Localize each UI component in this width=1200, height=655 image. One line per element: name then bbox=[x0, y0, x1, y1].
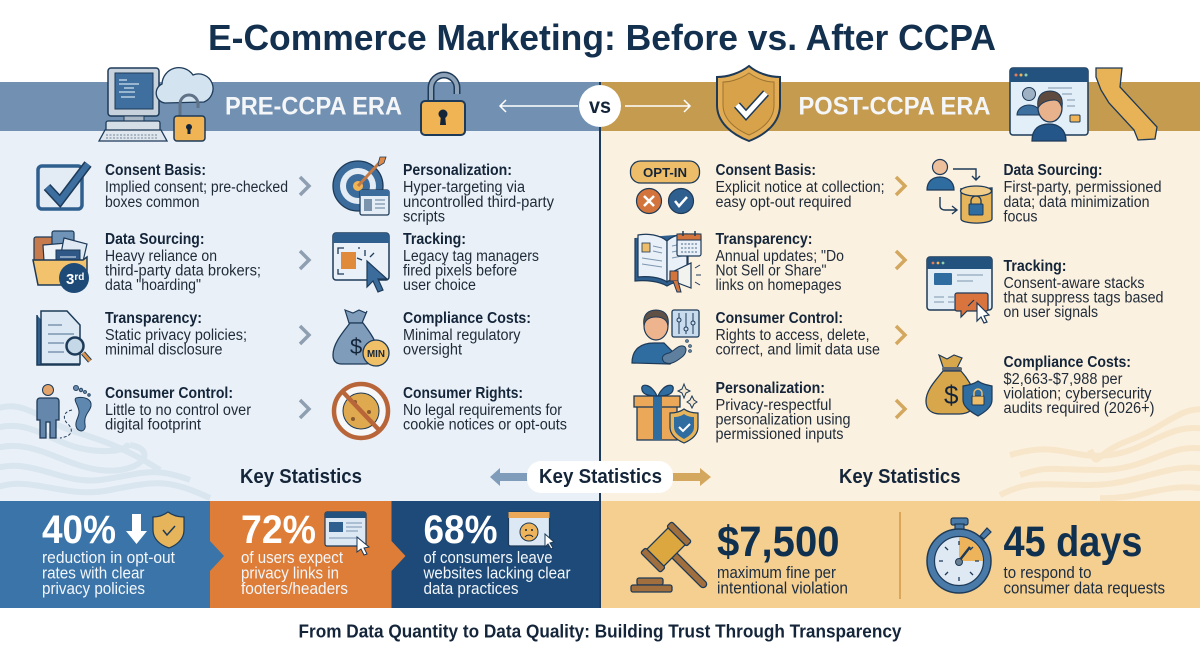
item: pre-CCPA consumer control: Consumer Control: bbox=[105, 385, 233, 402]
arrow: key statistics right bbox=[672, 468, 711, 486]
item: pre-CCPA tracking: user choice bbox=[403, 277, 476, 294]
item: post-CCPA consumer control: Consumer Control: bbox=[716, 310, 843, 327]
item: post-CCPA personalization: personalization using bbox=[716, 412, 850, 428]
arrow: right from vs bbox=[625, 100, 690, 112]
item: post-CCPA compliance costs: violation; cybersecurity bbox=[1004, 386, 1152, 402]
icon: folder with third-party badge: rd bbox=[74, 272, 84, 283]
icon: no cookies bbox=[334, 384, 388, 438]
item: pre-CCPA tracking bbox=[333, 231, 539, 294]
panel: post-CCPA statistics bbox=[601, 501, 1200, 608]
heading: post-CCPA era: POST-CCPA ERA bbox=[798, 92, 990, 120]
item: pre-CCPA personalization: scripts bbox=[403, 208, 445, 226]
item: post-CCPA consumer control: Rights to access, delete, bbox=[716, 327, 870, 344]
icon: computer with cloud and lock bbox=[99, 68, 213, 141]
item: post-CCPA data sourcing: data; data minimization bbox=[1004, 194, 1150, 211]
item: post-CCPA transparency: Annual updates; "Do bbox=[716, 248, 844, 265]
icon: person and footprint bbox=[37, 384, 91, 438]
chevrons: pre-CCPA column bbox=[300, 177, 309, 418]
panel: stat 40%: 40% bbox=[42, 508, 116, 552]
icon: user profile browser bbox=[1010, 68, 1088, 141]
icon: folder with third-party badge bbox=[33, 231, 89, 293]
item: pre-CCPA consent basis: boxes common bbox=[105, 194, 200, 211]
panel: stat 68%: websites lacking clear bbox=[423, 564, 571, 582]
arrow: key statistics left bbox=[490, 468, 528, 486]
icon: checkbox bbox=[38, 164, 88, 209]
title: E-Commerce Marketing: Before vs. After CCPA bbox=[208, 17, 996, 58]
stat: $7,500 fine: maximum fine per bbox=[717, 563, 836, 582]
item: pre-CCPA consumer rights: cookie notices or opt-outs bbox=[403, 416, 567, 434]
panel: post-CCPA background bbox=[600, 131, 1200, 501]
item: pre-CCPA consumer control bbox=[37, 384, 251, 438]
vs badge bbox=[579, 85, 621, 127]
icon: user to secure database bbox=[927, 160, 992, 223]
heading: pre-CCPA era: PRE-CCPA ERA bbox=[225, 92, 402, 120]
center key statistics pill bbox=[527, 461, 673, 493]
icon: document with magnifier bbox=[37, 311, 90, 365]
panel: stat 72% bbox=[210, 501, 393, 608]
panel: stat 68%: data practices bbox=[424, 579, 518, 598]
item: post-CCPA data sourcing: focus bbox=[1004, 208, 1038, 226]
item: post-CCPA personalization: permissioned inputs bbox=[716, 426, 844, 443]
footer tagline: From Data Quantity to Data Quality: Building Trust Through Transparency bbox=[298, 620, 902, 642]
item: pre-CCPA consumer rights bbox=[334, 384, 567, 438]
item: post-CCPA data sourcing bbox=[927, 160, 1162, 226]
item: pre-CCPA data sourcing: Data Sourcing: bbox=[105, 231, 204, 248]
item: post-CCPA transparency: Transparency: bbox=[716, 231, 812, 248]
item: pre-CCPA data sourcing bbox=[33, 231, 261, 294]
panel: stat 40% bbox=[0, 501, 212, 608]
icon: money bag with MIN coin: MIN bbox=[367, 349, 385, 360]
item: pre-CCPA consumer rights: Consumer Rights: bbox=[403, 385, 523, 402]
icon: target with arrow and card bbox=[333, 157, 389, 215]
item: pre-CCPA consent basis: Implied consent; pre-checked bbox=[105, 179, 288, 196]
item: post-CCPA transparency: Not Sell or Share" bbox=[716, 262, 826, 280]
item: post-CCPA consent basis bbox=[630, 161, 884, 214]
item: pre-CCPA consumer control: digital footprint bbox=[105, 416, 202, 434]
panel: stat 68%: of consumers leave bbox=[424, 548, 552, 567]
icon: money bag with shield: $ bbox=[944, 380, 959, 410]
panel: pre-CCPA background bbox=[0, 131, 600, 501]
item: post-CCPA tracking: Tracking: bbox=[1004, 258, 1066, 275]
panel: stat 68%: 68% bbox=[424, 508, 498, 552]
item: pre-CCPA transparency bbox=[37, 310, 247, 365]
item: post-CCPA tracking: Consent-aware stacks bbox=[1004, 275, 1145, 292]
item: pre-CCPA compliance costs: oversight bbox=[403, 342, 463, 358]
item: pre-CCPA consent basis: Consent Basis: bbox=[105, 162, 206, 179]
icon: stopwatch bbox=[927, 518, 991, 593]
stat: 45 days: to respond to bbox=[1004, 563, 1092, 582]
item: pre-CCPA transparency: Static privacy policies; bbox=[105, 327, 247, 344]
item: post-CCPA compliance costs: Compliance Costs: bbox=[1004, 354, 1131, 371]
item: pre-CCPA data sourcing: Heavy reliance on bbox=[105, 248, 217, 265]
panel: stat 40%: privacy policies bbox=[42, 579, 145, 598]
item: post-CCPA consent basis: easy opt-out required bbox=[716, 194, 852, 211]
item: pre-CCPA consumer rights: No legal requirements for bbox=[403, 402, 562, 419]
icon: money bag with MIN coin bbox=[333, 310, 389, 366]
icon: down arrow bbox=[126, 514, 147, 544]
panel: stat 40%: reduction in opt-out bbox=[42, 548, 175, 567]
center key statistics pill: Key Statistics bbox=[539, 466, 662, 488]
panel: stat 72%: 72% bbox=[241, 508, 316, 552]
item: pre-CCPA consumer control: Little to no control over bbox=[105, 402, 251, 419]
panel: stat 72%: of users expect bbox=[241, 548, 343, 567]
panel: post-CCPA header band bbox=[600, 82, 1200, 131]
item: pre-CCPA tracking: fired pixels before bbox=[403, 262, 517, 280]
item: pre-CCPA personalization: Hyper-targeting via bbox=[403, 179, 525, 196]
panel: stat 72%: privacy links in bbox=[241, 564, 339, 582]
panel: stat 68% bbox=[392, 501, 600, 608]
item: post-CCPA consumer control bbox=[632, 310, 880, 364]
icon: browser with cursor bbox=[325, 512, 369, 555]
icon: browser with scan and cursor bbox=[333, 233, 389, 292]
stat: $7,500 fine bbox=[631, 518, 848, 602]
icon: open padlock bbox=[421, 75, 465, 135]
item: pre-CCPA compliance costs bbox=[333, 310, 531, 366]
icon: gavel bbox=[631, 522, 721, 602]
item: post-CCPA personalization: Personalization: bbox=[716, 380, 825, 397]
arrow: left from vs bbox=[500, 100, 578, 112]
icon: person with sliders bbox=[632, 310, 699, 364]
item: post-CCPA consent basis: Consent Basis: bbox=[716, 162, 816, 179]
panel: stat 72%: footers/headers bbox=[241, 579, 348, 598]
item: post-CCPA transparency bbox=[635, 231, 844, 294]
item: pre-CCPA compliance costs: Minimal regulatory bbox=[403, 327, 521, 344]
chevrons: post-CCPA column bbox=[896, 177, 905, 418]
item: post-CCPA tracking: that suppress tags based bbox=[1004, 290, 1164, 306]
item: pre-CCPA personalization: uncontrolled third-party bbox=[403, 194, 554, 211]
item: post-CCPA data sourcing: Data Sourcing: bbox=[1004, 162, 1102, 179]
item: pre-CCPA data sourcing: third-party data brokers; bbox=[105, 262, 261, 280]
item: pre-CCPA transparency: minimal disclosure bbox=[105, 342, 222, 358]
vs badge: vs bbox=[589, 95, 611, 118]
item: pre-CCPA personalization: Personalization: bbox=[403, 162, 512, 179]
item: post-CCPA tracking bbox=[927, 257, 1164, 323]
stat: $7,500 fine: intentional violation bbox=[717, 578, 848, 598]
item: pre-CCPA transparency: Transparency: bbox=[105, 310, 202, 327]
item: post-CCPA consent basis: Explicit notice at collection; bbox=[716, 179, 884, 196]
panel: stat 40%: rates with clear bbox=[42, 564, 145, 582]
icon: opt-in pill and choices bbox=[630, 161, 700, 214]
item: post-CCPA compliance costs: audits required (2026+) bbox=[1004, 400, 1154, 417]
item: post-CCPA transparency: links on homepages bbox=[716, 277, 842, 294]
stat: 45 days bbox=[927, 518, 1165, 598]
panel: pre-CCPA header band bbox=[0, 82, 600, 131]
icon: shield with check bbox=[717, 66, 780, 141]
icon: money bag with shield bbox=[926, 355, 992, 416]
item: post-CCPA personalization bbox=[634, 380, 850, 443]
item: post-CCPA personalization: Privacy-respectful bbox=[716, 397, 832, 414]
item: pre-CCPA tracking: Legacy tag managers bbox=[403, 248, 539, 265]
icon: opt-in pill and choices: OPT-IN bbox=[643, 166, 687, 180]
heading: left key statistics: Key Statistics bbox=[240, 466, 362, 488]
heading: right key statistics: Key Statistics bbox=[839, 466, 960, 488]
icon: money bag with MIN coin: $ bbox=[350, 334, 362, 359]
icon: folder with third-party badge: 3 bbox=[66, 271, 74, 288]
icon: gift with shield bbox=[634, 384, 698, 443]
stat: 45 days: 45 days bbox=[1004, 518, 1142, 566]
item: post-CCPA data sourcing: First-party, permissioned bbox=[1004, 179, 1162, 196]
item: pre-CCPA personalization bbox=[333, 157, 554, 226]
icon: consent browser with chat and cursor bbox=[927, 257, 992, 323]
icon: gold shield bbox=[153, 512, 184, 548]
icon: California map bbox=[1096, 68, 1157, 140]
stat: $7,500 fine: $7,500 bbox=[717, 518, 840, 566]
item: post-CCPA tracking: on user signals bbox=[1004, 304, 1098, 321]
icon: book calendar megaphone bbox=[635, 231, 701, 292]
item: post-CCPA consumer control: correct, and limit data use bbox=[716, 342, 880, 358]
item: pre-CCPA compliance costs: Compliance Costs: bbox=[403, 310, 531, 327]
item: post-CCPA compliance costs bbox=[926, 354, 1154, 417]
stat: 45 days: consumer data requests bbox=[1004, 578, 1165, 598]
item: post-CCPA compliance costs: $2,663-$7,988 per bbox=[1004, 371, 1122, 388]
item: pre-CCPA consent basis bbox=[38, 162, 288, 211]
item: pre-CCPA data sourcing: data "hoarding" bbox=[105, 277, 201, 294]
item: pre-CCPA tracking: Tracking: bbox=[403, 231, 466, 248]
icon: browser with sad face bbox=[508, 512, 554, 549]
